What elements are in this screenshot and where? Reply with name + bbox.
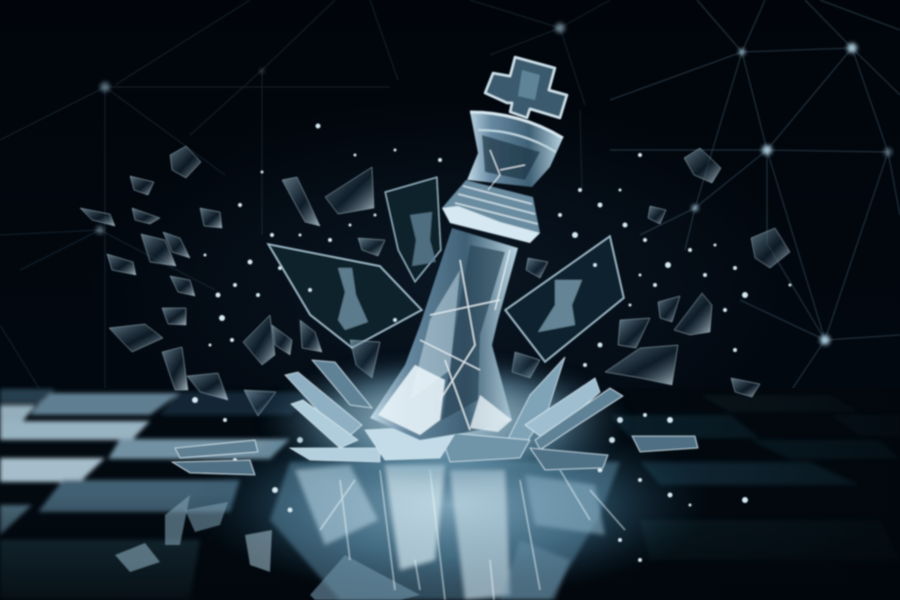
board squares left [0, 389, 320, 600]
king: body [370, 228, 518, 440]
network nodes [96, 23, 892, 429]
shard: upper mirror with pawn [385, 177, 441, 282]
chess king [370, 57, 567, 440]
glass crash pile at base [172, 355, 698, 485]
chess board [0, 388, 900, 600]
large glass panel shards [80, 146, 790, 416]
king: cross [485, 57, 567, 118]
scattered glass fragments [192, 124, 792, 562]
small floating shards [80, 146, 790, 416]
shard: left mirror with pawn [268, 244, 422, 348]
shard: right mirror with pawn [505, 236, 624, 362]
king: collar [442, 180, 540, 243]
king reflection [115, 410, 710, 600]
board squares right [610, 395, 900, 560]
network lines [0, 0, 900, 425]
king: crown [467, 112, 563, 190]
